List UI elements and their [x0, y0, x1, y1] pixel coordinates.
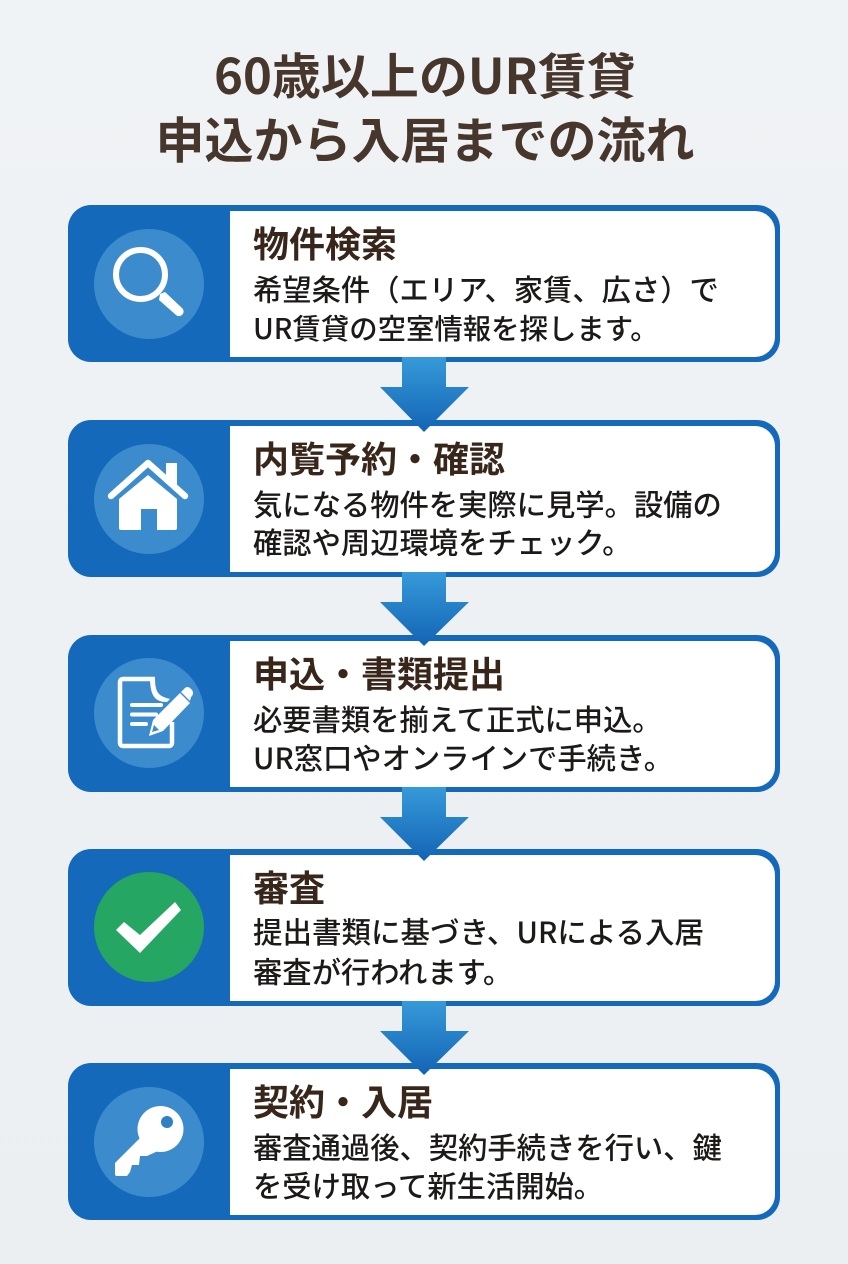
- text: step 4 description: 審査が行われます。: [253, 950, 512, 992]
- text: step 1 description: [253, 268, 719, 348]
- text: step 4 description: [253, 910, 704, 992]
- arrow: step 2 to 3: [380, 572, 469, 646]
- icon: green check mark: [94, 872, 204, 982]
- panel: step 4 審査: [68, 849, 780, 1006]
- text: step 1 description: 希望条件（エリア、家賃、広さ）で: [253, 268, 719, 310]
- title: 60歳以上のUR賃貸: [214, 38, 636, 109]
- icon: key: [94, 1087, 204, 1197]
- text: step 3 description: UR窓口やオンラインで手続き。: [253, 736, 673, 778]
- arrow: step 3 to 4: [380, 787, 469, 861]
- icon: house: [94, 444, 204, 554]
- text: step 2 description: [253, 482, 722, 562]
- icon: document and pen: [94, 658, 204, 768]
- panel: step 5 契約・入居: [68, 1063, 780, 1220]
- panel: step 3 申込・書類提出: [68, 635, 780, 792]
- text: step 1 description: UR賃貸の空室情報を探します。: [253, 307, 659, 348]
- text: step 5 description: [253, 1126, 722, 1206]
- text: step 4 description: 提出書類に基づき、URによる入居: [253, 910, 704, 952]
- text: step 2 description: 確認や周辺環境をチェック。: [253, 520, 632, 562]
- title: [155, 38, 695, 173]
- text: step 2 description: 気になる物件を実際に見学。設備の: [253, 482, 722, 524]
- heading: 内覧予約・確認: 内覧予約・確認: [253, 431, 505, 483]
- heading: 物件検索: 物件検索: [253, 216, 397, 268]
- text: step 5 description: を受け取って新生活開始。: [253, 1164, 603, 1206]
- heading: 契約・入居: 契約・入居: [253, 1074, 433, 1126]
- text: step 5 description: 審査通過後、契約手続きを行い、鍵: [253, 1126, 722, 1168]
- heading: 審査: 審査: [253, 860, 325, 912]
- text: step 3 description: [253, 698, 673, 778]
- heading: 申込・書類提出: 申込・書類提出: [253, 646, 505, 698]
- text: step 3 description: 必要書類を揃えて正式に申込。: [253, 698, 662, 740]
- panel: step 1 物件検索: [68, 205, 780, 362]
- title: 申込から入居までの流れ: [155, 102, 695, 173]
- arrow: step 4 to 5: [380, 1001, 469, 1075]
- panel: step 2 内覧予約・確認: [68, 420, 780, 577]
- arrow: step 1 to 2: [380, 357, 469, 432]
- icon: magnifying glass: [94, 229, 204, 339]
